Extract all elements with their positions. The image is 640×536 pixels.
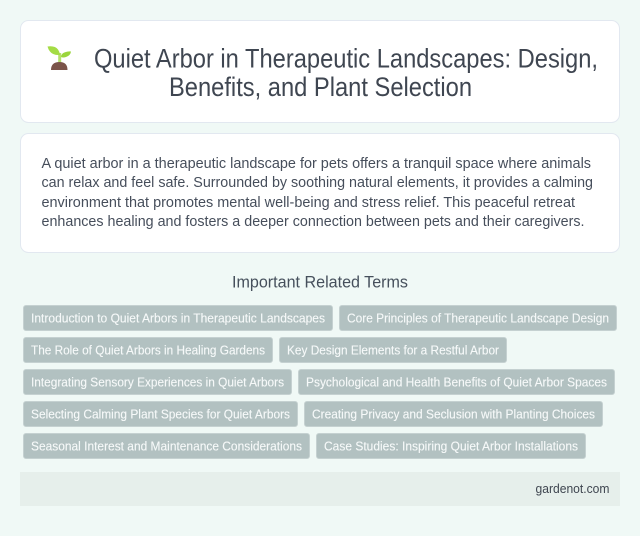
icon: seedling [48,46,71,70]
tag list [24,306,616,458]
footer: gardenot.com [536,481,610,496]
tag: sensory experiences [24,370,292,394]
tag: seasonal interest: Seasonal Interest and Maintenance Considerations [31,438,302,454]
tag: privacy [304,402,602,426]
text block: description: A quiet arbor in a therapeutic landscape for pets offers a tranquil space where animals [42,155,591,172]
tag: core principles: Core Principles of Therapeutic Landscape Design [347,310,609,326]
title: Quiet Arbor in Therapeutic Landscapes: Design, [94,44,598,74]
text block: description: environment that promotes mental well-being and stress relief. This peaceful retreat [42,194,576,211]
tag: case studies [316,434,586,458]
tag: calming plants: Selecting Calming Plant Species for Quiet Arbors [31,406,290,422]
tag: core principles [340,306,616,330]
tag: psychological benefits: Psychological and Health Benefits of Quiet Arbor Spaces [306,374,607,390]
text block: description [42,155,593,230]
tag: role: The Role of Quiet Arbors in Healing Gardens [31,342,265,358]
tag: seasonal interest [24,434,310,458]
tag: key design elements: Key Design Elements for a Restful Arbor [287,342,500,358]
title: Benefits, and Plant Selection [169,72,472,102]
tag: introduction [24,306,332,330]
tag: sensory experiences: Integrating Sensory Experiences in Quiet Arbors [31,374,284,390]
tag: role [24,338,272,362]
tag: case studies: Case Studies: Inspiring Quiet Arbor Installations [324,438,578,454]
text block: description: can relax and feel safe. Surrounded by soothing natural elements, it provides a calming [42,174,593,191]
tag: introduction: Introduction to Quiet Arbors in Therapeutic Landscapes [31,310,325,326]
tag: psychological benefits [298,370,614,394]
text block: description: enhances healing and fosters a deeper connection between pets and their caregivers. [42,213,584,230]
tag: key design elements [280,338,506,362]
title [94,44,598,102]
heading: important related terms: Important Related Terms [232,274,408,292]
tag: privacy: Creating Privacy and Seclusion with Planting Choices [312,406,595,422]
panel: description card [20,134,620,252]
footer [20,472,620,506]
tag: calming plants [24,402,298,426]
panel: title card [20,20,620,122]
